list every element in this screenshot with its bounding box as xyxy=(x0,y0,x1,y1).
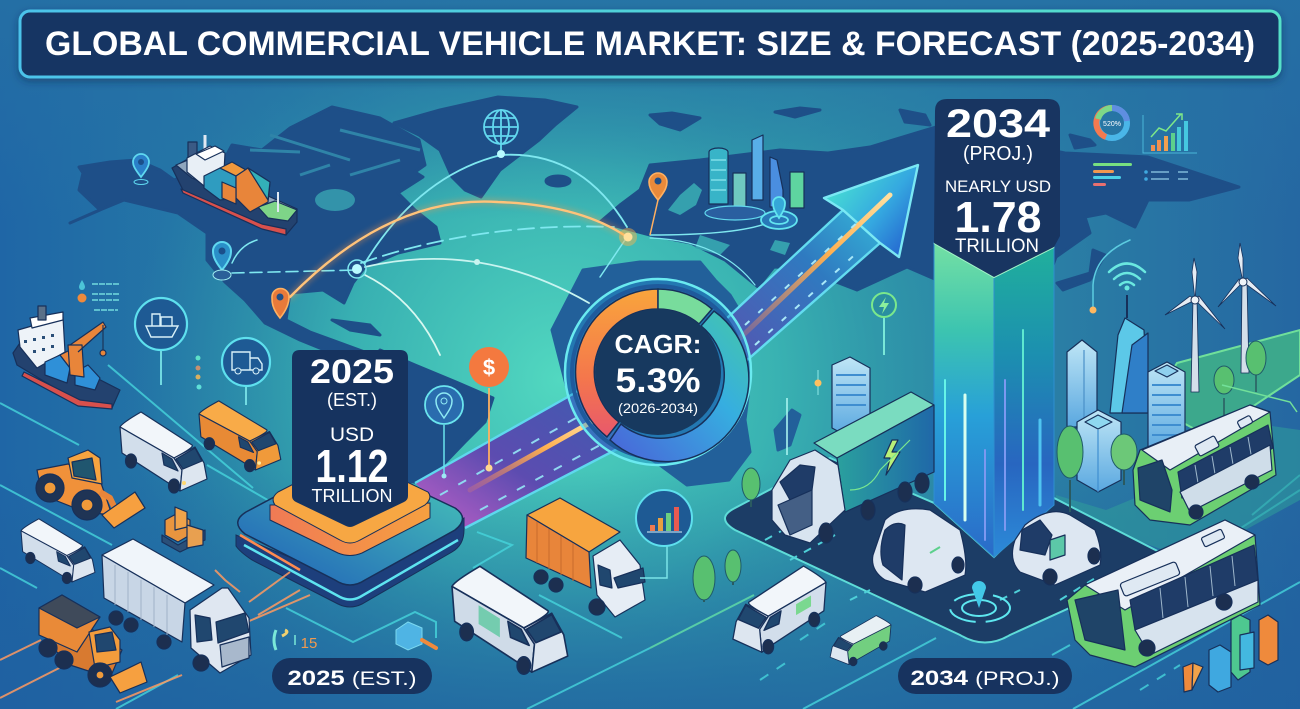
icon: dollar xyxy=(469,347,509,472)
white box van centre xyxy=(452,566,568,674)
city buildings right xyxy=(1067,295,1185,492)
2034 year: 2034 xyxy=(946,102,1051,146)
dots xyxy=(196,356,202,390)
ring: orange segment xyxy=(576,289,658,437)
icon: blue pin west coast xyxy=(213,242,231,280)
2025 value: 1.12 xyxy=(316,440,388,492)
electric bus top xyxy=(1133,405,1276,525)
electric bus bottom xyxy=(1067,520,1260,667)
purple road xyxy=(415,390,625,528)
orange container truck xyxy=(526,498,645,617)
autonomous pod 2 xyxy=(1012,512,1101,585)
platform 2025 xyxy=(236,455,464,607)
icon: chart circle xyxy=(636,490,692,578)
callout: 2025 value xyxy=(292,350,408,527)
data tower 2034 xyxy=(934,235,1054,557)
spark marker xyxy=(787,370,822,455)
pill: 2025 xyxy=(272,658,432,694)
2034 trillion: TRILLION xyxy=(955,236,1039,257)
orange speed lines xyxy=(0,570,310,702)
mini donut chart xyxy=(1096,108,1127,138)
white van top xyxy=(120,412,207,493)
world map xyxy=(70,97,1239,485)
pill: 2034 xyxy=(898,658,1072,694)
wheel loader xyxy=(36,450,145,528)
cardboard boxes xyxy=(162,507,205,552)
pill: 2034: 2034 (PROJ.) xyxy=(910,667,1060,690)
2034 proj: (PROJ.) xyxy=(963,143,1033,165)
icon: orange pin Europe xyxy=(649,173,667,235)
electric truck xyxy=(772,392,934,543)
trees city xyxy=(1057,426,1137,512)
ring: green segment xyxy=(658,289,712,324)
2025 year: 2025 xyxy=(310,353,394,391)
trees near turbines xyxy=(1214,341,1297,425)
icon: lightning circle xyxy=(872,293,896,355)
2025 trillion: TRILLION xyxy=(312,486,392,506)
route arcs xyxy=(232,150,770,355)
pill: 2025: 2025 (EST.) xyxy=(288,667,416,690)
icon: blue pin Alaska xyxy=(133,154,149,184)
title bar xyxy=(20,11,1280,77)
orange van xyxy=(199,401,281,472)
CAGR circle xyxy=(565,279,751,465)
mini donut chart: 520% xyxy=(1103,121,1121,128)
CAGR value: 5.3% xyxy=(616,362,700,400)
2034 value: 1.78 xyxy=(954,193,1042,242)
small marks: 15 xyxy=(301,635,317,652)
icon: dollar: $ xyxy=(483,355,495,380)
callout: 2034 value xyxy=(934,99,1060,277)
building left of truck xyxy=(832,357,870,435)
CAGR period: (2026-2034) xyxy=(618,400,698,416)
icon: orange pin Mexico xyxy=(272,288,289,318)
USD label: USD xyxy=(330,425,374,446)
small legend left xyxy=(78,280,120,310)
nearly USD: NEARLY USD xyxy=(945,177,1051,196)
icon: truck circle xyxy=(222,338,270,405)
2025 est: (EST.) xyxy=(327,390,377,410)
city skyline xyxy=(705,135,804,220)
wind turbines xyxy=(1165,243,1276,392)
dump truck loader xyxy=(39,595,147,693)
small green car xyxy=(830,616,891,666)
right platform xyxy=(725,330,1300,642)
autonomous pod 1 xyxy=(872,509,966,593)
cargo ship top xyxy=(172,135,297,235)
magnifier cube xyxy=(396,622,436,650)
mini legend bars xyxy=(1093,163,1188,186)
electric van right xyxy=(733,566,826,654)
small marks xyxy=(274,630,317,652)
icon: blue pin city xyxy=(761,197,797,229)
bar chart decoration xyxy=(1183,615,1278,692)
icon: wifi xyxy=(1090,240,1145,314)
location beacon xyxy=(950,581,1010,622)
mini bar chart xyxy=(1143,114,1197,153)
ring: blue segment xyxy=(610,311,749,462)
trees roadside xyxy=(693,468,760,602)
CAGR label: CAGR: xyxy=(614,329,702,359)
title bar: GLOBAL COMMERCIAL VEHICLE MARKET: SIZE & FORECAST (2025-2034) xyxy=(45,25,1255,63)
icon: globe xyxy=(484,110,518,150)
cargo ship left xyxy=(13,306,120,409)
growth arrow xyxy=(725,165,918,362)
white semi truck xyxy=(102,539,251,673)
white van left xyxy=(21,519,95,584)
icon: ship circle xyxy=(135,298,187,385)
icon: location circle xyxy=(425,386,463,478)
ground lines xyxy=(0,365,1300,709)
